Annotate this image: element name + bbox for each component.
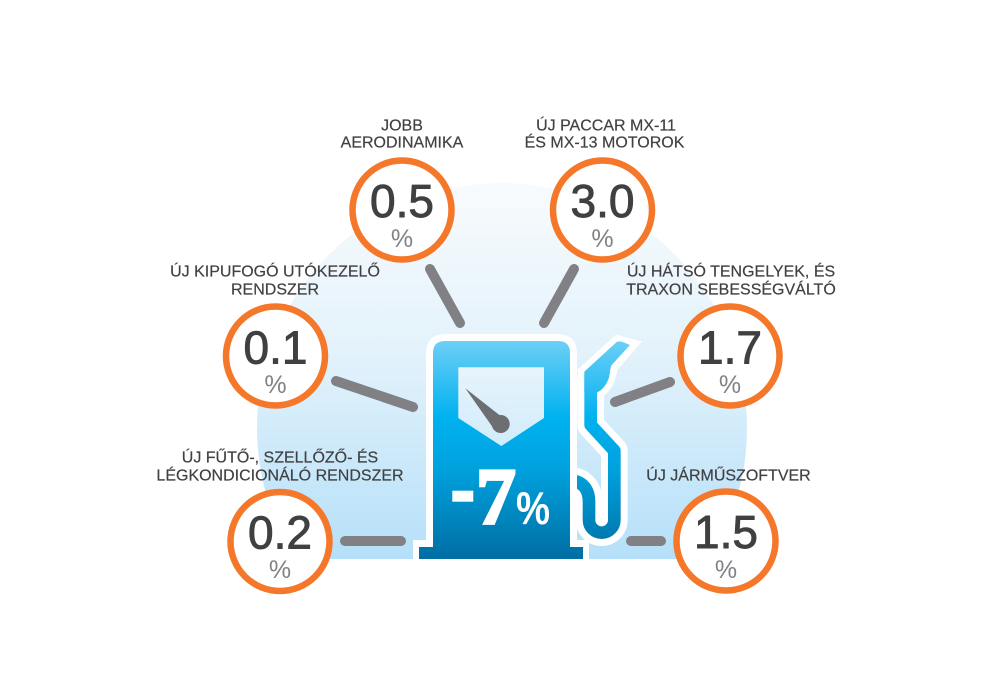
badge: 3.0 bbox=[571, 175, 634, 227]
item: rear axles and transmission bbox=[626, 262, 836, 406]
label: JOBB bbox=[381, 118, 423, 135]
badge: % bbox=[719, 371, 741, 399]
background dome bbox=[257, 191, 747, 559]
minus 7 percent bbox=[452, 453, 550, 541]
badge bbox=[352, 160, 452, 260]
label: ÚJ PACCAR MX-11 bbox=[536, 118, 676, 135]
minus 7 percent: % bbox=[516, 482, 550, 534]
label: ÚJ KIPUFOGÓ UTÓKEZELŐ bbox=[170, 264, 380, 280]
badge: % bbox=[715, 556, 737, 584]
pump nozzle and hose bbox=[568, 335, 642, 533]
badge bbox=[230, 492, 330, 591]
label: ÚJ HÁTSÓ TENGELYEK, ÉS bbox=[627, 264, 835, 280]
label: RENDSZER bbox=[231, 282, 319, 298]
label: ÚJ FŰTŐ-, SZELLŐZŐ- ÉS bbox=[182, 450, 378, 467]
item: aerodynamics bbox=[341, 118, 464, 260]
item: exhaust aftertreatment bbox=[170, 262, 380, 406]
label: AERODINAMIKA bbox=[341, 135, 464, 152]
badge: 0.2 bbox=[248, 506, 312, 558]
badge: 1.7 bbox=[698, 321, 762, 373]
minus 7 percent: 7 bbox=[476, 453, 516, 541]
badge bbox=[680, 306, 780, 406]
badge: % bbox=[391, 225, 413, 253]
item: vehicle software bbox=[646, 466, 811, 590]
badge: % bbox=[264, 371, 287, 399]
label: LÉGKONDICIONÁLÓ RENDSZER bbox=[156, 466, 404, 484]
badge: % bbox=[591, 225, 614, 253]
fuel pump bbox=[413, 334, 642, 559]
label: ÉS MX-13 MOTOROK bbox=[525, 133, 685, 152]
item: engines bbox=[525, 116, 685, 260]
label: ÚJ JÁRMŰSZOFTVER bbox=[646, 466, 811, 484]
gauge needle bbox=[465, 388, 510, 433]
badge: 0.1 bbox=[244, 321, 307, 373]
gauge window bbox=[458, 367, 544, 446]
item: HVAC bbox=[156, 448, 404, 591]
connector bars bbox=[336, 269, 670, 541]
badge: 0.5 bbox=[370, 175, 434, 227]
pump body bbox=[413, 334, 589, 559]
badge bbox=[553, 160, 652, 260]
badge: 1.5 bbox=[694, 506, 758, 558]
badge bbox=[226, 306, 325, 406]
label: TRAXON SEBESSÉGVÁLTÓ bbox=[626, 280, 836, 298]
badge: % bbox=[269, 556, 291, 584]
badge bbox=[676, 492, 776, 590]
